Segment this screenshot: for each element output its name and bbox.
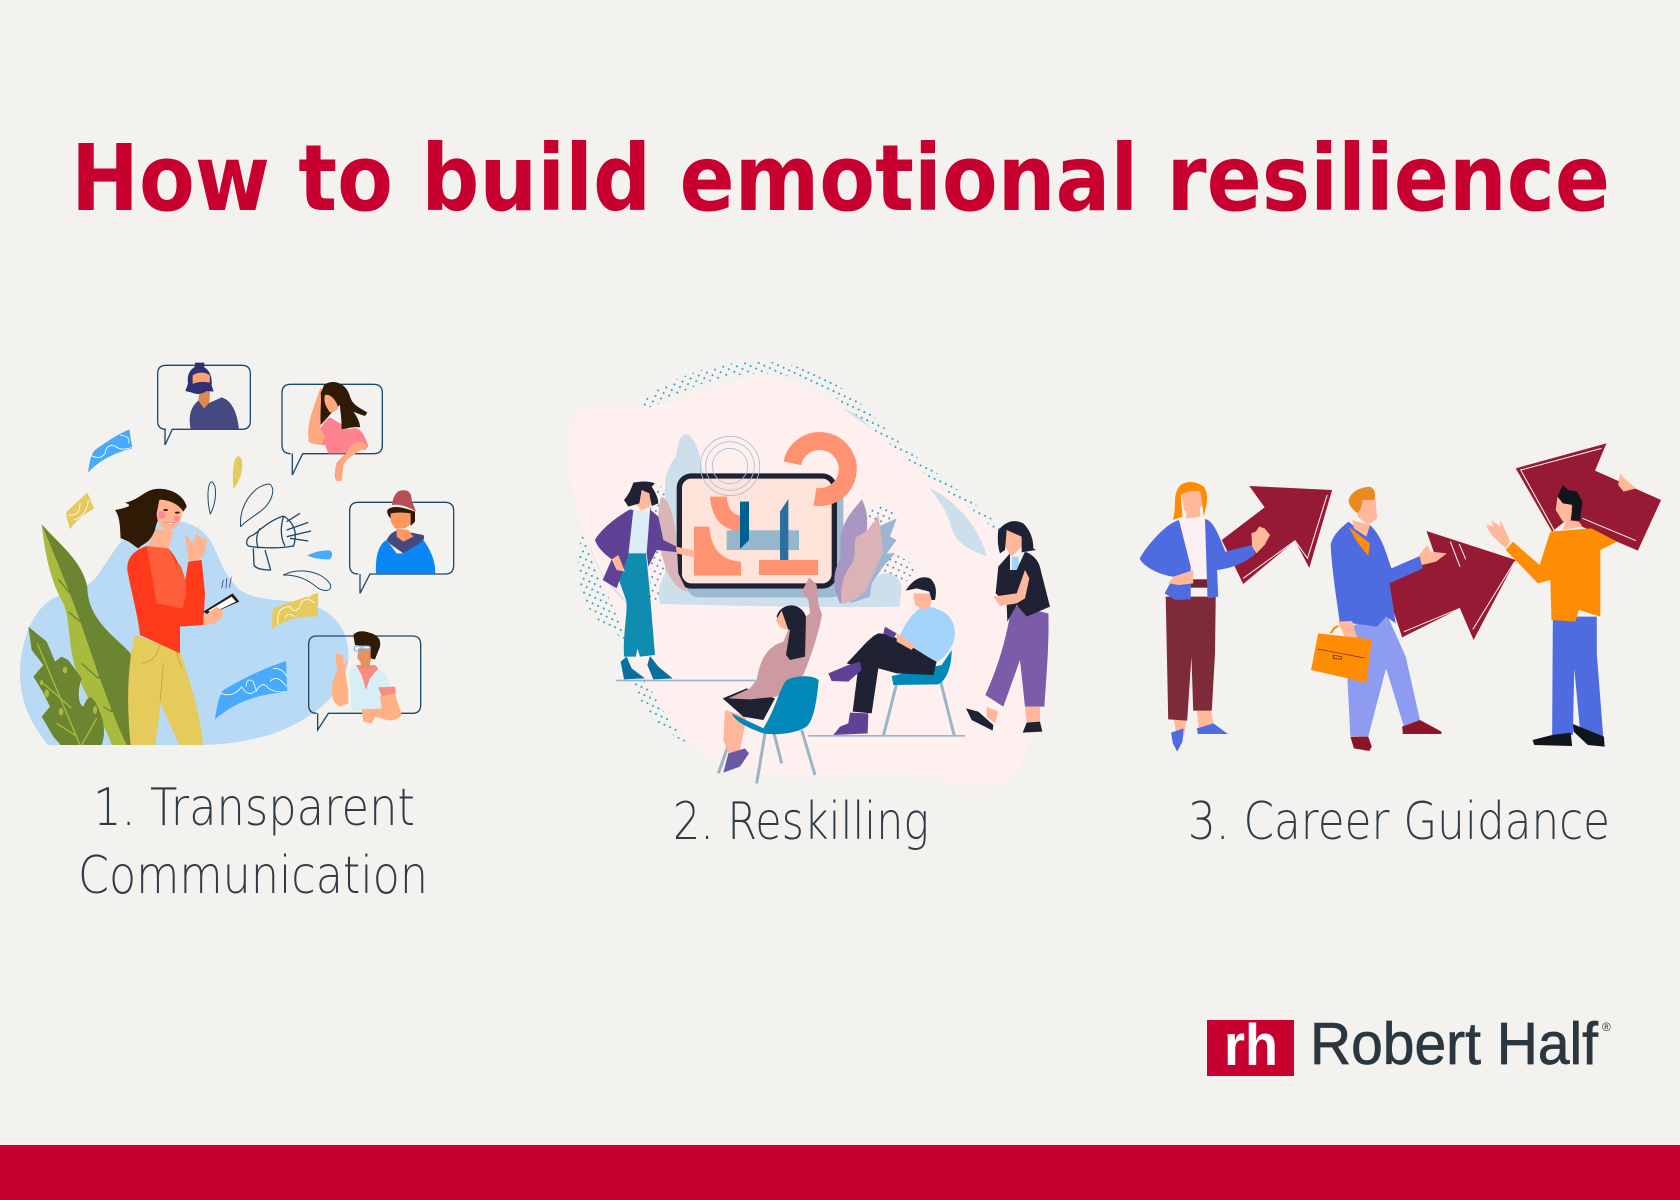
front leaf [28,627,104,745]
dots over blob [650,487,917,600]
decorative paper: blue and yellow [66,429,332,719]
logo: Robert Half: rh [1224,1013,1278,1078]
arrows [1222,443,1661,640]
caption 2: 2. Reskilling [673,792,929,852]
big leaf [42,524,131,745]
pale blue shapes [587,408,987,607]
woman with phone [115,489,239,745]
man with briefcase [1311,487,1447,751]
phone and hand [203,593,239,615]
sweater [127,546,205,653]
floor line [616,680,759,681]
logo: Robert Half: Robert Half [1310,1011,1599,1077]
student on chair [718,577,822,783]
background blob [20,520,348,745]
caption 1: 1. Transparent [93,778,415,838]
megaphone and speech marks [208,482,331,591]
face [157,499,183,531]
chat bubble: woman in pink [282,382,382,482]
illustration: transparent communication [20,363,454,745]
woman in blue jacket [1140,482,1270,752]
neck and hand [147,528,175,563]
hair back [115,489,187,548]
plants [658,497,897,604]
chat bubble: bearded man [158,363,250,445]
arrow highlights [1243,448,1636,632]
chat bubble: man with glasses [309,631,421,730]
pants [128,635,203,745]
caption 1: Communication [78,846,428,906]
chat bubble: man in hat [350,490,454,593]
presentation screen [679,436,848,597]
caption 1 [78,778,428,906]
pink background blob [568,377,1049,785]
man from behind [1486,473,1636,747]
woman walking [966,521,1050,733]
man reading on chair [808,577,965,737]
footer bar [0,1145,1680,1200]
illustration: reskilling [568,362,1050,785]
logo: Robert Half: ® [1602,1020,1611,1034]
illustration: career guidance [1140,443,1661,752]
presenter [595,481,695,679]
caption 3: 3. Career Guidance [1188,792,1610,852]
dotted arcs [578,362,1000,774]
